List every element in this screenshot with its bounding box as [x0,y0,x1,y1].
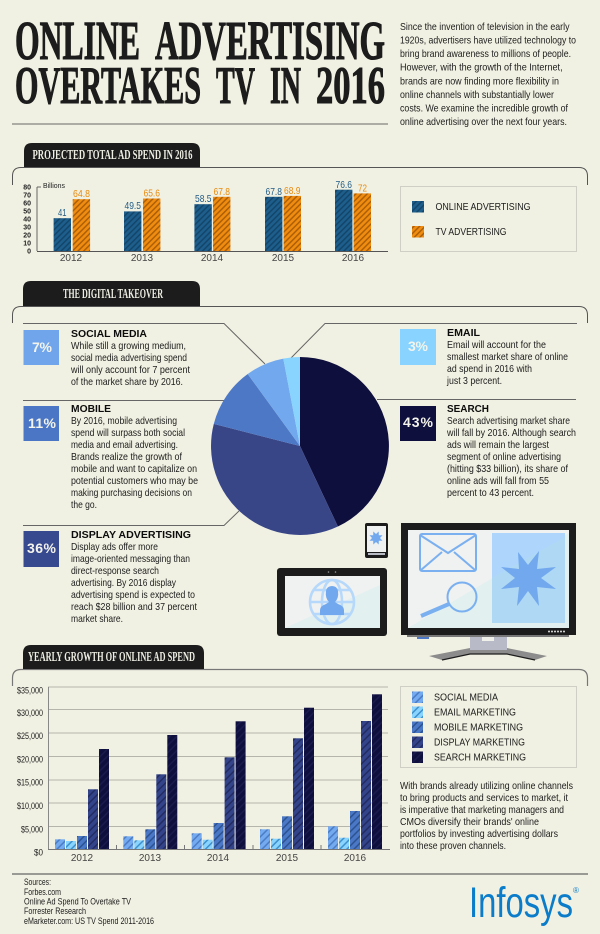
bar chart: yearly growth: 2012 [71,853,94,864]
callout: search: online ads will fall from 55 [447,475,549,487]
callout: search: will fall by 2016. Although search [446,427,576,439]
callout: mobile: the go. [71,499,97,511]
callout: mobile: media and email advertising. [71,439,178,451]
bar chart: yearly growth: $15,000 [17,778,43,788]
bar chart: online vs tv: 76.6 [336,179,352,191]
callout: display advertising: advertising spend is expected to [71,589,195,601]
callout: search: 43% [403,414,434,430]
legend: marketing channels: MOBILE MARKETING [434,722,523,734]
callout: social media: SOCIAL MEDIA [71,328,147,340]
callout: display advertising: Display ads offer more [71,541,158,553]
heading: the digital takeover [23,281,200,306]
title: TV [216,57,255,115]
bar chart: online vs tv: 2016 [342,253,365,264]
intro text: bring brand awareness to millions of people. [400,48,571,60]
callout: email: smallest market share of online [447,351,568,363]
legend: marketing channels: SEARCH MARKETING [434,752,526,764]
closing text block: into these proven channels. [400,840,506,852]
legend: marketing channels [400,686,576,768]
callout: email [400,327,568,387]
panel: projected total ad spend [12,143,588,264]
bar chart: online vs tv: 50 [23,208,31,216]
callout: mobile: 11% [28,415,57,431]
callout: display advertising: advertising. By 2016 display [71,577,177,589]
callout: mobile [24,403,198,511]
bar chart: yearly growth: $5,000 [21,824,43,836]
callout: mobile: mobile and want to capitalize on [71,463,197,475]
bar chart: online vs tv: 64.8 [73,188,90,200]
sources: Online Ad Spend To Overtake TV [24,896,131,906]
callout: search: percent to 43 percent. [447,487,534,499]
leader lines [23,324,577,526]
legend: marketing channels: DISPLAY MARKETING [434,736,525,748]
callout: email: EMAIL [447,327,481,339]
callout: mobile: By 2016, mobile advertising [71,415,177,427]
callout: search: segment of online advertising [447,451,561,463]
callout: mobile: potential customers who may be [71,475,198,487]
sources: eMarketer.com: US TV Spend 2011-2016 [24,916,154,926]
intro text: However, with the growth of the Internet, [400,62,563,74]
heading: yearly growth [23,645,204,669]
bar chart: online vs tv: 49.5 [124,200,141,212]
bar chart: online vs tv: 72 [358,182,367,194]
callout: display advertising: 36% [27,540,57,556]
callout: social media: will only account for 7 percent [70,364,190,376]
sources [24,877,154,926]
closing text block [400,780,573,852]
intro text: online channels with substantially lower [400,89,554,101]
callout: social media: While still a growing medium, [71,340,186,352]
bar chart: yearly growth: $25,000 [17,731,43,742]
closing text block: CMOs diversify their brands' online [400,816,539,828]
bar chart: online vs tv: 70 [23,192,31,200]
callout: display advertising: market share. [71,613,123,625]
panel: the digital takeover [12,281,588,660]
panel: yearly growth of online ad spend [12,645,588,864]
intro text: brands are now finding more flexibility in [400,76,559,88]
bar chart: yearly growth: 2015 [276,853,299,864]
intro text [400,21,576,128]
callout: social media: 7% [32,339,53,355]
legend: online vs tv: ONLINE ADVERTISING [436,201,530,213]
bar chart: online vs tv: 2013 [131,253,154,264]
sources: Forbes.com [24,887,61,897]
callout: mobile: making purchasing decisions on [71,487,192,499]
bar chart: online vs tv: 2015 [272,253,295,264]
bar chart: online vs tv: 20 [23,232,31,240]
heading: projected total ad spend [24,143,200,167]
legend: online vs tv: TV ADVERTISING [436,226,506,238]
title: IN [270,57,301,115]
bar chart: online vs tv: 68.9 [284,185,301,197]
callout: display advertising: direct-response search [71,565,159,577]
bar chart: online vs tv: 60 [23,200,31,208]
callout: social media [24,328,190,388]
title [15,10,385,115]
callout: search: SEARCH [447,403,489,415]
closing text block: to bring products and services to market, it [400,792,568,804]
bar chart: online vs tv: Billions [43,181,65,190]
bar chart: online vs tv: 0 [27,248,31,256]
sources: Sources: [24,877,51,887]
bar chart: online vs tv: 10 [23,240,31,248]
bar chart: online vs tv: 65.6 [144,188,160,200]
callout: display advertising [24,529,197,625]
bar chart: online vs tv: 30 [23,224,31,232]
callout: display advertising: DISPLAY ADVERTISING [71,529,191,541]
legend: marketing channels: EMAIL MARKETING [434,706,516,718]
icon: phone [365,523,388,558]
callout: mobile: Brands realize the growth of [71,451,182,463]
bar chart: online vs tv: 80 [23,184,31,192]
bar chart: online vs tv: 58.5 [195,193,212,205]
intro text: costs. We examine the incredible growth of [400,102,568,114]
callout: mobile: MOBILE [71,403,111,415]
callout: social media: of the market share by 2016. [71,376,183,388]
callout: search: (hitting $33 billion), its share of [447,463,568,475]
bar chart: online vs tv: 2014 [201,253,224,264]
bar chart: online vs tv: 2012 [60,253,83,264]
icon: desktop monitor [401,523,576,660]
bar chart: online vs tv: 67.8 [214,186,230,198]
callout: email: Email will account for the [447,339,546,351]
title: ADVERTISING [155,10,385,71]
bar chart: yearly growth: $10,000 [17,801,43,812]
callout: email: 3% [408,338,429,354]
title: ONLINE [15,10,140,71]
bar chart: yearly growth: 2014 [207,853,230,864]
callout: mobile: spend will surpass both social [71,427,185,439]
bar chart: online vs tv [23,179,388,264]
bar chart: online vs tv: 41 [58,207,67,219]
bar chart: yearly growth: $20,000 [17,754,43,766]
title: OVERTAKES [15,57,201,115]
legend: marketing channels: SOCIAL MEDIA [434,692,498,704]
sources: Forrester Research [24,906,86,916]
callout: display advertising: reach $28 billion and 37 percent [71,601,197,613]
bar chart: yearly growth: 2016 [344,853,367,864]
intro text: Since the invention of television in the early [400,21,570,33]
bar chart: yearly growth: 2013 [139,853,162,864]
bar chart: yearly growth: $30,000 [17,708,43,719]
legend: online vs tv [400,186,576,252]
logo: Infosys: ® [573,886,579,895]
heading: projected total ad spend: PROJECTED TOTAL AD SPEND IN 2016 [32,148,192,163]
closing text block: portfolios by investing advertising dollars [400,828,558,840]
callout: search: ads will remain the largest [447,439,549,451]
title: 2016 [316,57,385,115]
heading: yearly growth: YEARLY GROWTH OF ONLINE AD SPEND [28,650,195,665]
bar chart: yearly growth: $0 [34,848,43,858]
closing text block: is imperative that marketing managers and [400,804,564,816]
callout: email: just 3 percent. [446,375,502,387]
bar chart: yearly growth: $35,000 [17,686,43,696]
icon: tablet with globe [277,568,387,636]
bar chart: online vs tv: 40 [23,216,31,224]
callout: email: ad spend in 2016 with [447,363,532,375]
callout: display advertising: image-oriented messaging than [71,553,190,565]
bar chart: yearly growth [17,686,390,864]
heading: the digital takeover: THE DIGITAL TAKEOVER [63,287,164,302]
intro text: online advertising over the next four years. [400,116,567,128]
callout: search: Search advertising market share [447,415,570,427]
callout: search [400,403,576,499]
callout: social media: social media advertising spend [71,352,187,364]
bar chart: online vs tv: 67.8 [266,186,282,198]
pie chart [211,357,389,535]
